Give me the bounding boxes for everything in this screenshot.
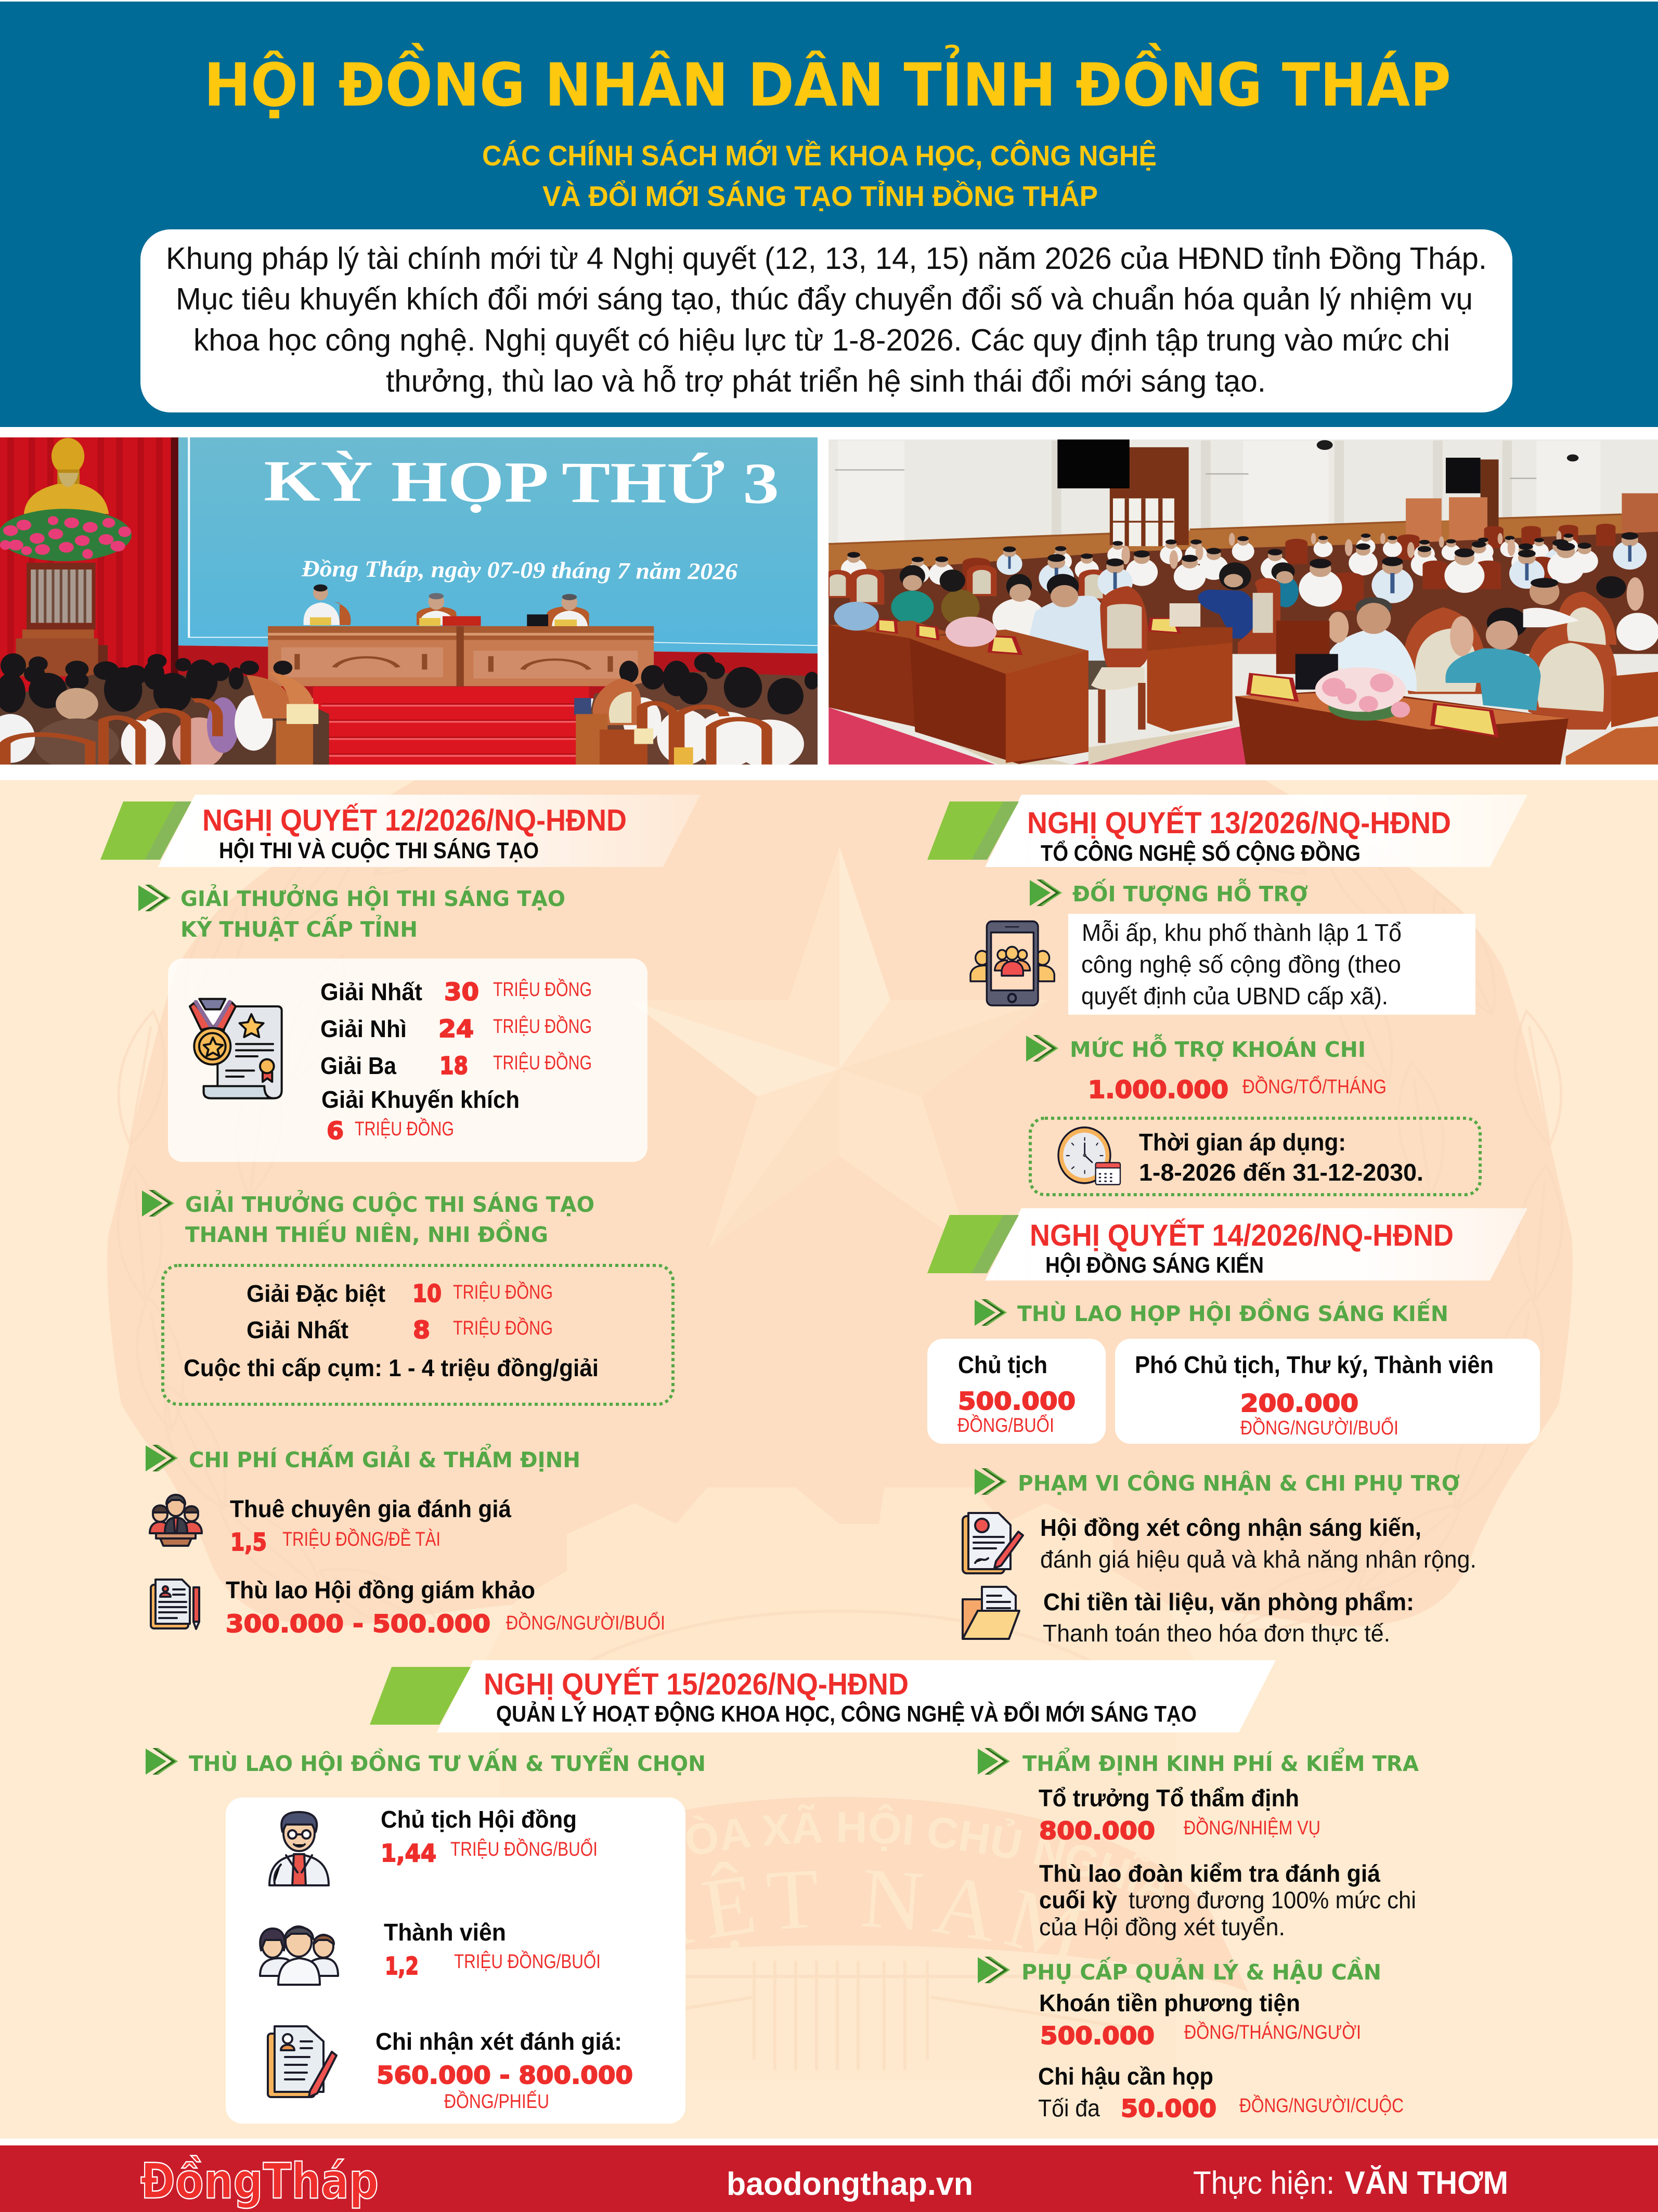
- icon: document and pen: [151, 1580, 199, 1629]
- icon: phone with community: [970, 921, 1054, 1005]
- presiding delegates: [303, 585, 589, 628]
- amount: monthly support: 1.000.000: [1088, 1076, 1228, 1104]
- row: document costs: Chi tiền tài liệu, văn phòng phẩm:: [1043, 1588, 1414, 1615]
- heading: allowances: PHỤ CẤP QUẢN LÝ & HẬU CẦN: [1021, 1957, 1381, 1985]
- row: council recognition: [1040, 1514, 1476, 1573]
- banner 14: HỘI ĐỒNG SÁNG KIẾN: [1045, 1251, 1264, 1278]
- icon: council members: [260, 1926, 338, 1985]
- row: transport allowance: 500.000: [1040, 2022, 1155, 2050]
- card: chairman pay: [927, 1339, 1106, 1444]
- title: HỘI ĐỒNG NHÂN DÂN TỈNH ĐỒNG THÁP: [204, 43, 1451, 120]
- amount: monthly support: ĐỒNG/TỔ/THÁNG: [1242, 1075, 1387, 1098]
- panel: provincial prizes: [168, 959, 647, 1162]
- photo: delegates voting: [822, 432, 1658, 765]
- intro text box: Mục tiêu khuyến khích đổi mới sáng tạo, thúc đẩy chuyển đổi số và chuẩn hóa quản lý nhiệm vụ: [176, 282, 1473, 316]
- heading: youth contest prizes: GIẢI THƯỞNG CUỘC THI SÁNG TẠO: [185, 1189, 594, 1217]
- row: meeting logistics: [1038, 2063, 1404, 2123]
- icon: signed document: [963, 1513, 1023, 1573]
- delegate foreground left: [1027, 574, 1148, 743]
- row: meeting logistics: 50.000: [1121, 2094, 1216, 2123]
- icon: clock and calendar: [1058, 1128, 1120, 1185]
- text: inspection team pay: tương đương 100% mức chi: [1129, 1886, 1416, 1913]
- row: first prize: [320, 978, 592, 1006]
- heading: youth contest prizes: THANH THIẾU NIÊN, NHI ĐỒNG: [185, 1219, 548, 1247]
- ribbon with country name: VIỆT NAM: [685, 1861, 1087, 1956]
- heading: recognition scope: PHẠM VI CÔNG NHẬN & CHI PHỤ TRỢ: [1018, 1471, 1460, 1496]
- row: transport allowance: [1039, 1989, 1361, 2050]
- desks and flowers: [828, 602, 1658, 765]
- heading: youth contest prizes: [142, 1189, 594, 1247]
- card: chairman pay: ĐỒNG/BUỔI: [957, 1413, 1054, 1437]
- row: first prize: Giải Nhất: [320, 978, 422, 1005]
- row: second prize: 24: [438, 1015, 474, 1043]
- card: members pay: Phó Chủ tịch, Thư ký, Thành viên: [1135, 1351, 1494, 1378]
- section: resolution 15: [146, 1660, 1419, 2124]
- panel: youth prizes: TRIỆU ĐỒNG: [453, 1280, 553, 1303]
- text: inspection team pay: cuối kỳ: [1039, 1886, 1117, 1913]
- banner 12: NGHỊ QUYẾT 12/2026/NQ-HĐND: [202, 804, 627, 837]
- row: encouragement prize: TRIỆU ĐỒNG: [355, 1117, 454, 1140]
- watermark background: national emblem: [0, 780, 1658, 2139]
- card: members pay: 200.000: [1240, 1389, 1358, 1417]
- website: baodongthap.vn: [727, 2166, 973, 2202]
- credit: VĂN THƠM: [1345, 2165, 1508, 2201]
- banner 15: QUẢN LÝ HOẠT ĐỘNG KHOA HỌC, CÔNG NGHỆ VÀ ĐỔI MỚI SÁNG TẠO: [496, 1700, 1197, 1727]
- panel: application period: 1-8-2026 đến 31-12-2030.: [1139, 1159, 1423, 1186]
- card: members pay: [1115, 1339, 1540, 1444]
- banner 14: [927, 1208, 1527, 1280]
- panel: advisory council pay: Thành viên: [384, 1919, 506, 1946]
- row: expert evaluation: Thuê chuyên gia đánh giá: [230, 1495, 511, 1522]
- section: resolution 13: [927, 795, 1527, 1195]
- row: expert evaluation: 1,5: [230, 1528, 267, 1556]
- row: council recognition: đánh giá hiệu quả và khả năng nhân rộng.: [1040, 1546, 1476, 1573]
- row: meeting logistics: Chi hậu cần họp: [1038, 2063, 1213, 2090]
- heading: budget appraisal: THẨM ĐỊNH KINH PHÍ & KIỂM TRA: [1022, 1748, 1419, 1776]
- icon: folder: [963, 1587, 1019, 1639]
- subtitle: VÀ ĐỔI MỚI SÁNG TẠO TỈNH ĐỒNG THÁP: [542, 180, 1098, 212]
- row: third prize: [320, 1051, 592, 1080]
- logo: ĐồngTháp: [140, 2153, 379, 2210]
- heading: support target: ĐỐI TƯỢNG HỖ TRỢ: [1072, 878, 1308, 907]
- row: appraisal team leader: Tổ trưởng Tổ thẩm định: [1039, 1784, 1299, 1812]
- banner 13: NGHỊ QUYẾT 13/2026/NQ-HĐND: [1027, 806, 1451, 840]
- row: third prize: Giải Ba: [320, 1052, 396, 1079]
- heading: provincial contest prizes: [138, 884, 565, 942]
- heading: support amount: MỨC HỖ TRỢ KHOÁN CHI: [1070, 1034, 1366, 1062]
- gear: [484, 1487, 1196, 2080]
- presiding table: [268, 626, 654, 686]
- row: expert evaluation: [230, 1495, 511, 1556]
- text: inspection team pay: Thù lao đoàn kiểm tra đánh giá: [1039, 1860, 1380, 1887]
- row: transport allowance: ĐỒNG/THÁNG/NGƯỜI: [1184, 2021, 1361, 2043]
- panel: youth prizes: [163, 1265, 673, 1404]
- heading: provincial contest prizes: KỸ THUẬT CẤP TỈNH: [180, 914, 418, 942]
- panel: youth prizes: 10: [412, 1279, 442, 1308]
- text: inspection team pay: [1039, 1860, 1416, 1941]
- star: [628, 847, 1051, 1248]
- header band: [0, 2, 1658, 427]
- intro text box: Khung pháp lý tài chính mới từ 4 Nghị quyết (12, 13, 14, 15) năm 2026 của HĐND tỉnh Đồng Tháp.: [166, 241, 1487, 276]
- row: jury remuneration: ĐỒNG/NGƯỜI/BUỔI: [506, 1611, 665, 1634]
- text box: support target: Mỗi ấp, khu phố thành lập 1 Tổ: [1082, 919, 1402, 946]
- card: members pay: ĐỒNG/NGƯỜI/BUỔI: [1240, 1416, 1398, 1439]
- panel: advisory council pay: TRIỆU ĐỒNG/BUỔI: [454, 1949, 601, 1973]
- panel: advisory council pay: 1,2: [385, 1952, 419, 1980]
- banner 13: [927, 795, 1527, 867]
- row: document costs: Thanh toán theo hóa đơn thực tế.: [1043, 1620, 1390, 1647]
- panel: application period: [1030, 1118, 1480, 1195]
- ribbon with country name: CỘNG HÒA XÃ HỘI CHỦ NGHĨA: [686, 1804, 1164, 1905]
- row: meeting logistics: ĐỒNG/NGƯỜI/CUỘC: [1239, 2094, 1404, 2117]
- row: jury remuneration: 300.000 - 500.000: [226, 1610, 490, 1638]
- panel: advisory council pay: Chi nhận xét đánh giá:: [375, 2028, 622, 2055]
- row: council recognition: Hội đồng xét công nhận sáng kiến,: [1040, 1514, 1421, 1541]
- panel: advisory council pay: 1,44: [381, 1839, 436, 1867]
- heading: council meeting pay: THÙ LAO HỌP HỘI ĐỒNG SÁNG KIẾN: [1017, 1298, 1448, 1326]
- heading: provincial contest prizes: GIẢI THƯỞNG HỘI THI SÁNG TẠO: [180, 884, 565, 911]
- text box: support target: công nghệ số cộng đồng (theo: [1081, 951, 1401, 978]
- icon: experts at podium: [150, 1495, 202, 1546]
- panel: advisory council pay: [226, 1797, 685, 2124]
- text box: support target: [1068, 914, 1475, 1015]
- heading: advisory council pay: THÙ LAO HỘI ĐỒNG TƯ VẤN & TUYỂN CHỌN: [189, 1748, 706, 1776]
- banner 12: HỘI THI VÀ CUỘC THI SÁNG TẠO: [219, 837, 539, 863]
- row: encouragement prize: 6: [327, 1117, 344, 1145]
- row: first prize: 30: [444, 978, 479, 1006]
- section: resolution 12: [100, 795, 701, 1638]
- panel: youth prizes: Giải Đặc biệt: [247, 1280, 385, 1307]
- panel: advisory council pay: ĐỒNG/PHIẾU: [444, 2090, 549, 2113]
- row: appraisal team leader: ĐỒNG/NHIỆM VỤ: [1184, 1816, 1320, 1839]
- banner 15: [370, 1660, 1276, 1732]
- row: meeting logistics: Tối đa: [1038, 2094, 1100, 2122]
- panel: youth prizes: TRIỆU ĐỒNG: [453, 1316, 553, 1339]
- wreath leaves: [109, 779, 1571, 1647]
- icon: medal and certificate: [190, 999, 282, 1098]
- delegate foreground right: [1327, 576, 1658, 730]
- intro text box: [140, 229, 1512, 412]
- delegates rows: [824, 524, 1658, 654]
- subtitle: CÁC CHÍNH SÁCH MỚI VỀ KHOA HỌC, CÔNG NGHỆ: [482, 139, 1157, 172]
- panel: youth prizes: 8: [413, 1316, 430, 1344]
- photo: session stage: Đồng Tháp, ngày 07-09 tháng 7 năm 2026: [301, 555, 738, 585]
- row: second prize: Giải Nhì: [320, 1015, 407, 1042]
- panel: youth prizes: Cuộc thi cấp cụm: 1 - 4 triệu đồng/giải: [184, 1354, 599, 1381]
- row: expert evaluation: TRIỆU ĐỒNG/ĐỀ TÀI: [282, 1528, 441, 1550]
- photo: session stage: KỲ HỌP THỨ 3: [264, 449, 780, 516]
- footer bar: [0, 2145, 1658, 2212]
- icon: doctor: [269, 1812, 329, 1885]
- row: first prize: TRIỆU ĐỒNG: [493, 978, 592, 1001]
- amount: monthly support: [1088, 1075, 1387, 1104]
- row: jury remuneration: [226, 1576, 665, 1638]
- row: third prize: 18: [439, 1052, 468, 1080]
- row: second prize: TRIỆU ĐỒNG: [493, 1015, 592, 1038]
- credit: Thực hiện:: [1193, 2165, 1335, 2201]
- card: chairman pay: 500.000: [958, 1387, 1076, 1415]
- panel: youth prizes: Giải Nhất: [247, 1316, 348, 1343]
- banner 12: [100, 795, 701, 867]
- subtitle: [482, 139, 1157, 212]
- banner 13: TỔ CÔNG NGHỆ SỐ CỘNG ĐỒNG: [1041, 839, 1361, 866]
- heading: judging costs: CHI PHÍ CHẤM GIẢI & THẨM ĐỊNH: [189, 1444, 580, 1472]
- text box: support target: quyết định của UBND cấp xã).: [1081, 982, 1388, 1010]
- card: chairman pay: Chủ tịch: [958, 1351, 1047, 1378]
- row: jury remuneration: Thù lao Hội đồng giám khảo: [226, 1576, 535, 1603]
- photo: session stage: [0, 432, 828, 770]
- row: third prize: TRIỆU ĐỒNG: [493, 1051, 592, 1074]
- row: encouragement prize: [321, 1086, 520, 1145]
- credit: [1193, 2165, 1508, 2201]
- panel: advisory council pay: 560.000 - 800.000: [377, 2061, 633, 2089]
- panel: application period: Thời gian áp dụng:: [1139, 1129, 1346, 1156]
- intro text box: khoa học công nghệ. Nghị quyết có hiệu lực từ 1-8-2026. Các quy định tập trung vào mức chi: [193, 323, 1450, 357]
- panel: advisory council pay: Chủ tịch Hội đồng: [381, 1806, 577, 1833]
- audience right: [574, 654, 828, 769]
- icon: evaluation form: [268, 2026, 336, 2097]
- row: document costs: [1043, 1588, 1414, 1647]
- row: appraisal team leader: 800.000: [1039, 1817, 1155, 1845]
- banner 15: NGHỊ QUYẾT 15/2026/NQ-HĐND: [484, 1667, 909, 1701]
- row: second prize: [320, 1015, 592, 1043]
- ribbon with country name: [685, 1797, 1248, 1992]
- section: resolution 14: [927, 1208, 1540, 1647]
- banner 14: NGHỊ QUYẾT 14/2026/NQ-HĐND: [1030, 1219, 1454, 1252]
- panel: advisory council pay: TRIỆU ĐỒNG/BUỔI: [450, 1837, 598, 1860]
- row: transport allowance: Khoán tiền phương tiện: [1039, 1989, 1300, 2016]
- audience left: [0, 653, 329, 770]
- intro text box: thưởng, thù lao và hỗ trợ phát triển hệ sinh thái đổi mới sáng tạo.: [386, 364, 1266, 398]
- row: encouragement prize: Giải Khuyến khích: [321, 1086, 520, 1113]
- row: appraisal team leader: [1039, 1784, 1320, 1845]
- text: inspection team pay: của Hội đồng xét tuyển.: [1039, 1913, 1285, 1941]
